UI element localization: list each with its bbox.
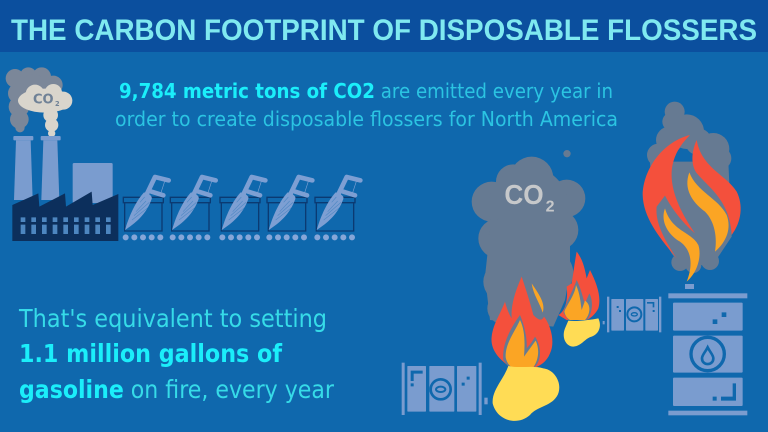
icon: right flame: [643, 102, 741, 282]
icon: factory smoke: 2: [55, 100, 60, 108]
icon: factory building: [12, 192, 118, 241]
icon: factory smoke: CO: [33, 92, 54, 107]
icon: small flame: [558, 252, 599, 320]
icon: big flame: [491, 277, 552, 367]
illustration: burning barrels: [402, 102, 747, 421]
icon: big yellow gasoline puddle: [493, 366, 559, 421]
illustration: burning barrels: 2: [546, 199, 555, 216]
icon: flossers on conveyor: [123, 177, 360, 240]
icon: factory with smoke: [6, 67, 118, 241]
text block: emissions statement: [115, 79, 618, 131]
text block: emissions statement: order to create disposable flossers for North America: [115, 107, 618, 131]
icon: flames and gasoline puddles: [491, 252, 600, 421]
text block: gasoline equivalent: That's equivalent to setting: [18, 304, 327, 333]
icon: large tipped barrel: [402, 363, 488, 415]
windows: [21, 217, 111, 234]
title banner: [0, 0, 768, 52]
icon: upright oil barrel: [668, 284, 747, 415]
text block: emissions statement: 9,784 metric tons of CO2 are emitted every year in: [119, 79, 613, 103]
icon: big CO2 cloud: [472, 150, 585, 327]
text block: gasoline equivalent: [18, 304, 335, 404]
icon: small yellow gasoline puddle: [564, 318, 600, 347]
icon: chimneys and building: [13, 136, 113, 203]
text block: gasoline equivalent: 1.1 million gallons of: [19, 339, 283, 368]
label: CO2 in big cloud: CO: [504, 179, 544, 210]
text block: gasoline equivalent: gasoline on fire, every year: [19, 375, 335, 404]
icon: factory smoke: [6, 67, 72, 137]
icon: small tipped barrel: [603, 297, 661, 332]
